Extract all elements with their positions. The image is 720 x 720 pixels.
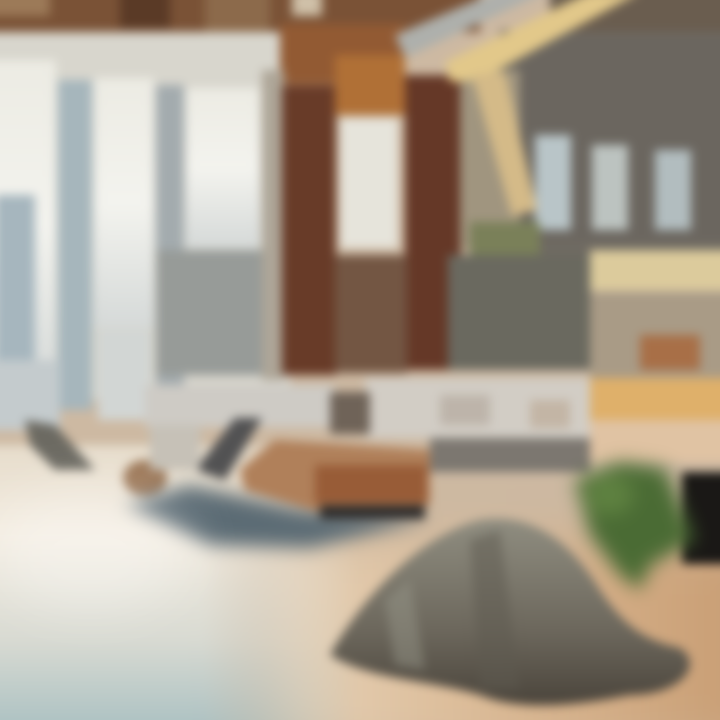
overall soft highlight on floor [0, 490, 190, 610]
right wall with dark panels and bright windows [460, 35, 720, 250]
chairs and side pieces [25, 418, 262, 496]
plant [575, 462, 695, 590]
white sofa [145, 378, 590, 472]
ceiling: wood beams [0, 0, 720, 84]
floor: pale reflective area [0, 445, 360, 720]
floor: warm wood area [270, 540, 720, 720]
grey stone mound [330, 519, 690, 705]
glowing ceiling beam [445, 0, 640, 216]
shelving and lit shelves [448, 222, 720, 462]
rug [125, 485, 430, 548]
dark cabinet [682, 472, 720, 564]
wooden coffee table [240, 440, 430, 519]
left windows [0, 60, 284, 430]
wood pillars and central window [282, 55, 461, 375]
